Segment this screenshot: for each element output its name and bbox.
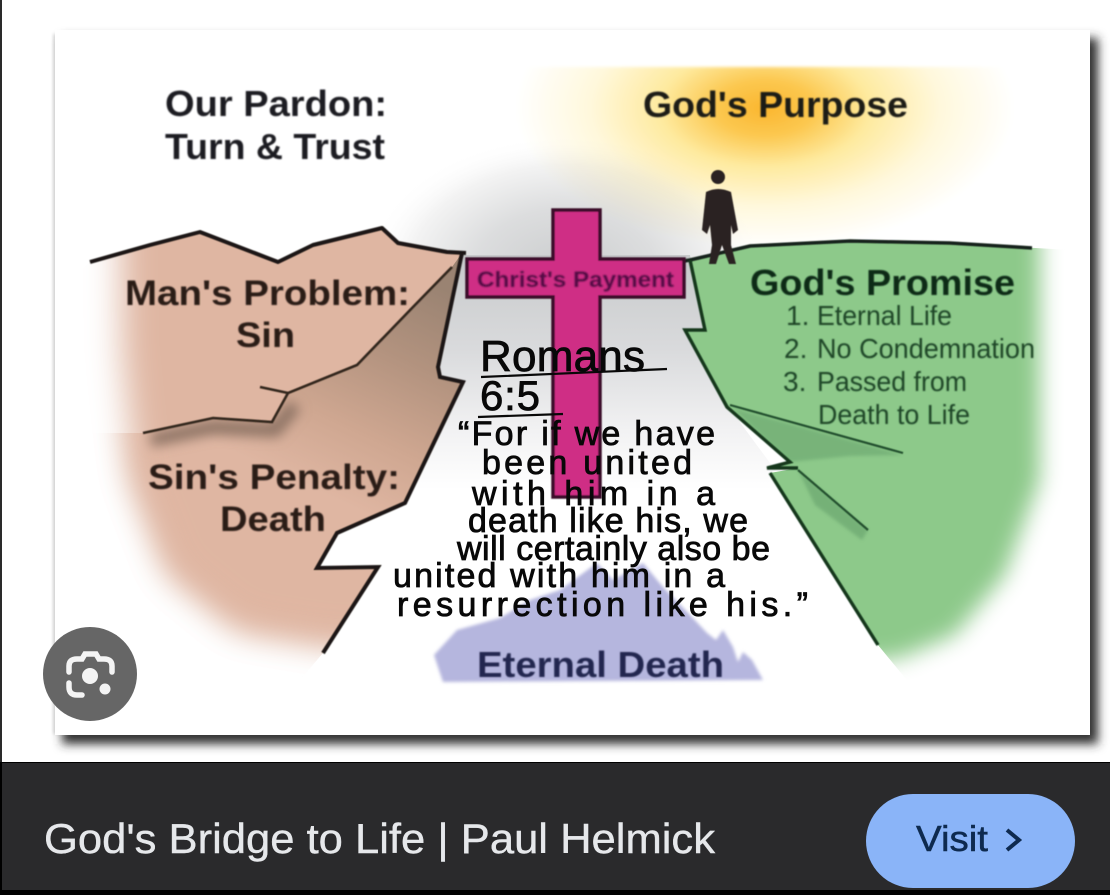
yellow glow behind God's Purpose <box>515 67 1015 267</box>
label: man's problem <box>125 274 410 355</box>
promise list: No Condemnation <box>817 333 1035 364</box>
crack line <box>143 267 452 433</box>
handwritten verse: resurrection like his.” <box>397 586 808 624</box>
mountain label: Eternal Death <box>477 644 724 685</box>
bottom bar <box>0 762 1110 895</box>
grey glow behind the cross <box>365 135 765 405</box>
text: God's promise: God's Promise <box>750 262 1015 303</box>
label: man's problem: Sin <box>236 316 295 355</box>
handwritten verse: with him in a <box>471 475 715 513</box>
handwritten verse: united with him in a <box>393 557 725 595</box>
label: sin's penalty: Death <box>220 500 326 539</box>
promise list: Death to Life <box>818 399 970 430</box>
panel: right cliff <box>672 241 1070 690</box>
visit button <box>866 794 1075 888</box>
chasm edge outline <box>317 253 463 653</box>
heading: God's purpose: God's Purpose <box>643 84 908 125</box>
cross label: Christ's Payment <box>477 267 675 292</box>
handwritten verse: death like his, we <box>468 502 748 540</box>
promise list: 1. <box>786 300 809 331</box>
chasm edge outline <box>685 260 878 645</box>
handwritten verse <box>393 332 808 624</box>
label: sin's penalty <box>148 458 400 539</box>
fold shading lower <box>798 470 868 540</box>
heading: our pardon: Turn & Trust <box>165 126 385 167</box>
fold lines <box>730 405 903 530</box>
panel: left cliff <box>88 225 467 664</box>
text: God's promise <box>750 262 1035 430</box>
shaded lower cliff <box>108 256 460 660</box>
fold shading upper <box>732 408 903 462</box>
label: man's problem: Man's Problem: <box>125 274 410 313</box>
handwritten verse: been united <box>482 444 692 482</box>
icon: cross <box>467 210 684 497</box>
icon: standing person <box>702 170 738 264</box>
page title: God's Bridge to Life | Paul Helmick <box>44 815 716 862</box>
visit button: Visit <box>916 818 988 859</box>
cliff top outline <box>672 241 1032 263</box>
handwritten verse: Romans <box>480 332 645 381</box>
heading: our pardon: Our Pardon: <box>165 83 387 124</box>
handwritten verse: 6:5 <box>480 372 540 419</box>
cliff top outline <box>90 228 466 262</box>
promise list <box>783 300 1035 430</box>
promise list: 2. <box>784 333 807 364</box>
promise list: Passed from <box>817 366 967 397</box>
icon: lens button <box>43 627 137 721</box>
handwritten verse: “For if we have <box>458 415 715 453</box>
label: sin's penalty: Sin's Penalty: <box>148 458 400 497</box>
handwritten verse: will certainly also be <box>456 530 770 568</box>
heading: our pardon <box>165 83 387 167</box>
image card with drop shadow <box>53 30 1098 744</box>
panel: eternal death mountain <box>434 563 763 685</box>
promise list: Eternal Life <box>817 300 952 331</box>
promise list: 3. <box>783 366 806 397</box>
chasm shading <box>405 255 790 490</box>
